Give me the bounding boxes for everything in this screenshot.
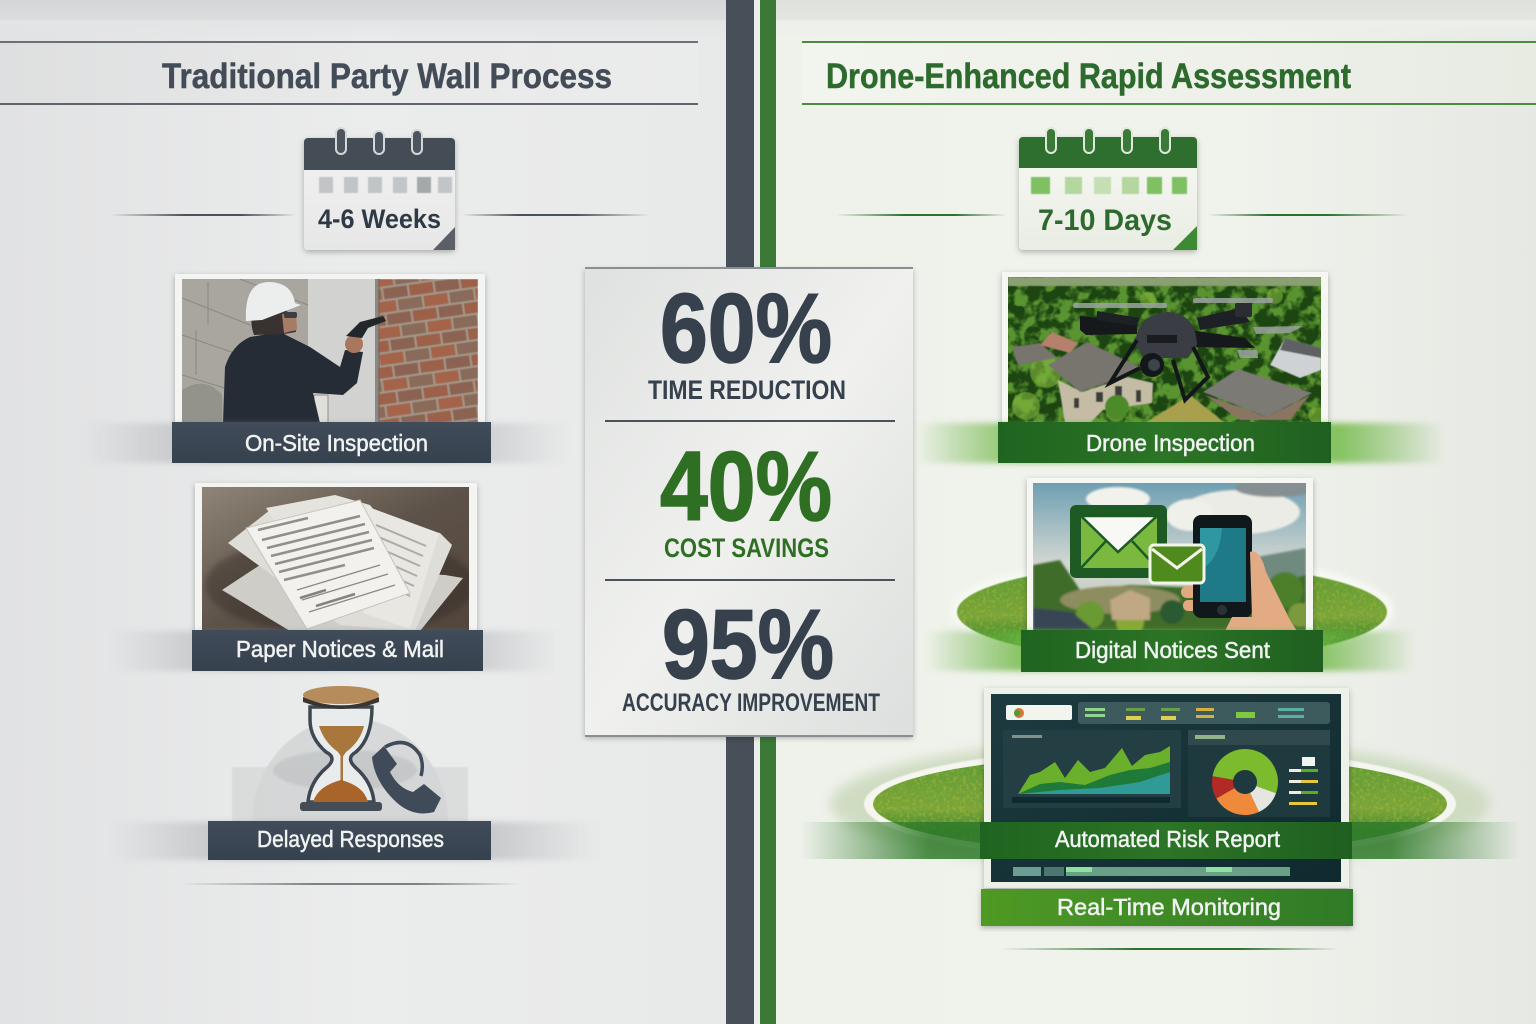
stat: 60% time reduction: TIME REDUCTION	[648, 375, 846, 405]
donut chart panel	[1188, 730, 1330, 817]
right label strips	[800, 423, 1520, 859]
stat: 95% accuracy improvement: 95%	[662, 589, 834, 699]
label: Digital Notices Sent: Digital Notices Sent	[1075, 637, 1271, 663]
area chart panel	[1003, 730, 1181, 808]
left label strips	[80, 423, 600, 860]
stat: 40% cost savings: COST SAVINGS	[664, 533, 829, 563]
stat: 95% accuracy improvement: ACCURACY IMPROVEMENT	[622, 689, 880, 717]
label: Digital Notices Sent	[1021, 630, 1323, 672]
hourglass and phone icon	[232, 686, 468, 822]
drone	[1073, 298, 1303, 400]
label: On-Site Inspection: On-Site Inspection	[245, 430, 428, 456]
photo: on-site inspection	[175, 274, 485, 426]
dashboard lower strip	[1013, 867, 1290, 876]
label: Real-Time Monitoring: Real-Time Monitoring	[1057, 894, 1281, 920]
label: Automated Risk Report: Automated Risk Report	[1055, 826, 1281, 852]
center stats panel	[585, 267, 913, 737]
left calendar: 4-6 Weeks: 4-6 Weeks	[318, 204, 441, 234]
label: Drone Inspection	[998, 422, 1331, 463]
stat: 95% accuracy improvement	[622, 589, 880, 717]
left header	[0, 41, 698, 105]
right header: Drone-Enhanced Rapid Assessment	[826, 57, 1351, 96]
label: Automated Risk Report	[980, 822, 1352, 859]
central divider: grey and green columns	[726, 0, 776, 1024]
label: Real-Time Monitoring	[981, 889, 1353, 926]
label: Paper Notices & Mail	[192, 630, 483, 671]
label: On-Site Inspection	[172, 422, 491, 463]
label: Delayed Responses: Delayed Responses	[257, 826, 444, 852]
left header: Traditional Party Wall Process	[162, 57, 612, 96]
right header	[802, 41, 1536, 105]
left calendar: 4-6 Weeks	[110, 128, 650, 250]
green lawn ellipse behind dashboard	[830, 740, 1490, 868]
label: Delayed Responses	[208, 821, 491, 860]
right calendar: 7-10 Days: 7-10 Days	[1038, 204, 1172, 237]
photo: digital notices	[1027, 478, 1315, 636]
background: left half	[0, 0, 726, 1024]
photo: dashboard screen	[984, 688, 1349, 888]
label: Paper Notices & Mail: Paper Notices & Mail	[236, 636, 444, 662]
stat: 40% cost savings: 40%	[660, 431, 832, 541]
background: right half	[776, 0, 1536, 1024]
photo: paper notices	[195, 483, 477, 635]
stat: 60% time reduction: 60%	[660, 273, 832, 383]
photo: drone inspection	[1002, 272, 1328, 426]
dashboard top bar	[1006, 702, 1330, 724]
right calendar: 7-10 Days	[836, 128, 1408, 250]
label: Drone Inspection: Drone Inspection	[1086, 430, 1255, 456]
green glow ellipse behind digital notices	[956, 574, 1392, 646]
